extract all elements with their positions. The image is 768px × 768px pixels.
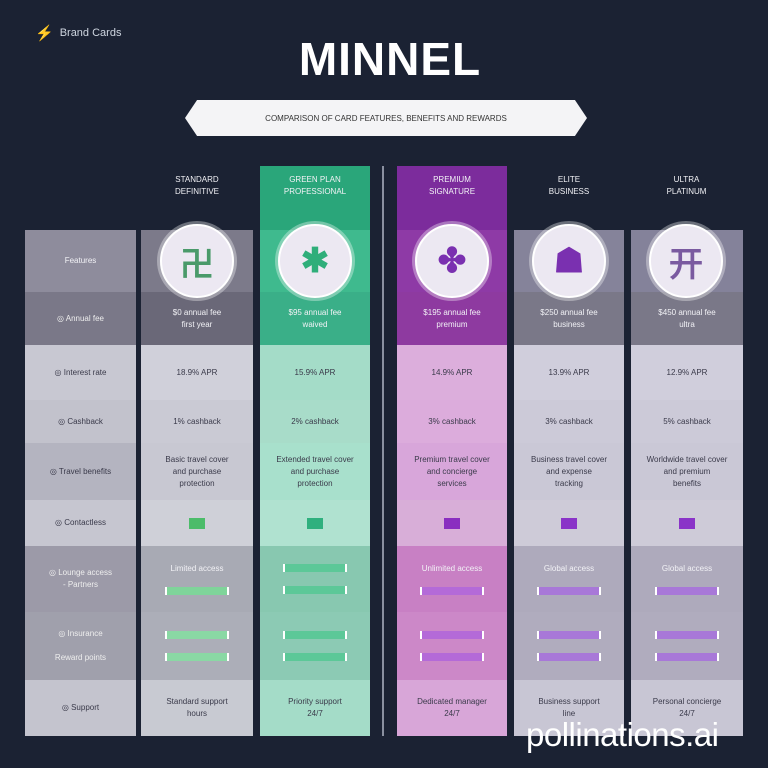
- table: [25, 230, 743, 736]
- icon circles: [157, 221, 726, 301]
- col2 green: waived: [303, 320, 327, 328]
- label column: ◎ Annual fee: [57, 314, 104, 322]
- col4: [514, 230, 624, 736]
- col3 purple: [397, 230, 507, 736]
- header: green: GREEN PLAN: [289, 175, 341, 184]
- col4: business: [553, 320, 585, 328]
- col1: 18.9% APR: [177, 368, 217, 376]
- header: green: PROFESSIONAL: [284, 187, 346, 196]
- icon: purple card 1: [415, 224, 489, 298]
- col3 purple: 14.9% APR: [432, 368, 472, 376]
- col3 purple: and concierge: [427, 466, 477, 476]
- icon: green card 1: [160, 224, 234, 298]
- divider line: [382, 166, 384, 736]
- header: purple: [397, 166, 507, 230]
- col3 purple: 24/7: [444, 709, 460, 718]
- col3 purple: $195 annual fee: [423, 308, 481, 316]
- watermark: pollinations.ai: [526, 716, 718, 753]
- col1: Standard support: [166, 697, 228, 706]
- col5: and premium: [664, 466, 710, 476]
- icon: green card 1: 卍: [180, 246, 214, 284]
- col5: Worldwide travel cover: [647, 454, 727, 464]
- column headers: [175, 166, 706, 230]
- column headers: DEFINITIVE: [175, 187, 219, 196]
- col1: [141, 230, 253, 736]
- col2 green: Priority support: [288, 697, 342, 706]
- icon: green card 2: [278, 224, 352, 298]
- col5: 24/7: [679, 709, 695, 718]
- col4: Business travel cover: [531, 454, 607, 464]
- col5: [631, 230, 743, 736]
- logo: ⚡: [35, 25, 54, 42]
- col4: Business support: [538, 697, 600, 706]
- col5: Global access: [662, 564, 712, 573]
- col3 purple: premium: [436, 320, 468, 328]
- col5: 5% cashback: [663, 416, 711, 426]
- label column: [25, 230, 136, 736]
- col1: $0 annual fee: [173, 308, 221, 316]
- subtitle banner: [185, 100, 587, 136]
- label column: ◎ Insurance: [58, 629, 103, 638]
- col2 green: and purchase: [291, 466, 339, 476]
- col5: $450 annual fee: [658, 308, 716, 316]
- col4: $250 annual fee: [540, 308, 598, 316]
- column headers: BUSINESS: [549, 187, 589, 196]
- col4: line: [563, 709, 575, 718]
- logo: Brand Cards: [60, 27, 121, 39]
- col2 green: 2% cashback: [291, 416, 339, 426]
- title: MINNEL: [299, 33, 481, 85]
- col5: benefits: [673, 478, 701, 488]
- col5: ultra: [679, 320, 695, 328]
- column headers: STANDARD: [175, 175, 219, 184]
- col4: 13.9% APR: [549, 368, 589, 376]
- col1: protection: [179, 478, 215, 488]
- col2 green: 15.9% APR: [295, 368, 335, 376]
- col1: 1% cashback: [173, 416, 221, 426]
- label column: ◎ Interest rate: [55, 368, 106, 376]
- icon: purple card 1: ✤: [438, 242, 466, 280]
- col3 purple: services: [437, 478, 467, 488]
- icon: green card 2: ✱: [301, 242, 329, 280]
- col4: tracking: [555, 478, 583, 488]
- icon: purple card 2: [532, 224, 606, 298]
- col4: Global access: [544, 564, 594, 573]
- label column: Features: [65, 256, 96, 265]
- label column: ◎ Support: [62, 703, 99, 712]
- col5: 12.9% APR: [667, 368, 707, 376]
- header: green: [260, 166, 370, 230]
- subtitle banner: COMPARISON OF CARD FEATURES, BENEFITS AND REWARDS: [265, 114, 507, 122]
- col2 green: $95 annual fee: [289, 308, 341, 316]
- col3 purple: Dedicated manager: [417, 697, 487, 706]
- logo: [35, 24, 122, 42]
- icon: purple card 3: [649, 224, 723, 298]
- col3 purple: Premium travel cover: [414, 454, 490, 464]
- col4: and expense: [546, 466, 592, 476]
- col1: hours: [187, 709, 207, 718]
- column headers: PLATINUM: [667, 187, 706, 196]
- col2 green: [260, 230, 370, 736]
- label column: ◎ Cashback: [58, 416, 103, 426]
- col2 green: Extended travel cover: [276, 454, 354, 464]
- icon: purple card 3: 开: [669, 246, 703, 284]
- col1: Limited access: [171, 564, 223, 573]
- label column: Reward points: [55, 653, 106, 662]
- header: purple: SIGNATURE: [429, 187, 475, 196]
- col3 purple: Unlimited access: [422, 564, 482, 573]
- col3 purple: 3% cashback: [428, 416, 476, 426]
- column headers: ULTRA: [674, 175, 699, 184]
- label column: - Partners: [63, 580, 98, 589]
- col1: and purchase: [173, 466, 221, 476]
- col1: Basic travel cover: [165, 454, 229, 464]
- col5: Personal concierge: [653, 697, 721, 706]
- icon: purple card 2: ☗: [554, 242, 584, 280]
- col1: first year: [182, 320, 212, 328]
- col2 green: 24/7: [307, 709, 323, 718]
- label column: ◎ Lounge access: [49, 568, 112, 577]
- column headers: ELITE: [558, 175, 580, 184]
- header: purple: PREMIUM: [433, 175, 471, 184]
- col2 green: protection: [297, 478, 333, 488]
- label column: ◎ Contactless: [55, 518, 106, 527]
- label column: ◎ Travel benefits: [50, 466, 111, 476]
- col4: 3% cashback: [545, 416, 593, 426]
